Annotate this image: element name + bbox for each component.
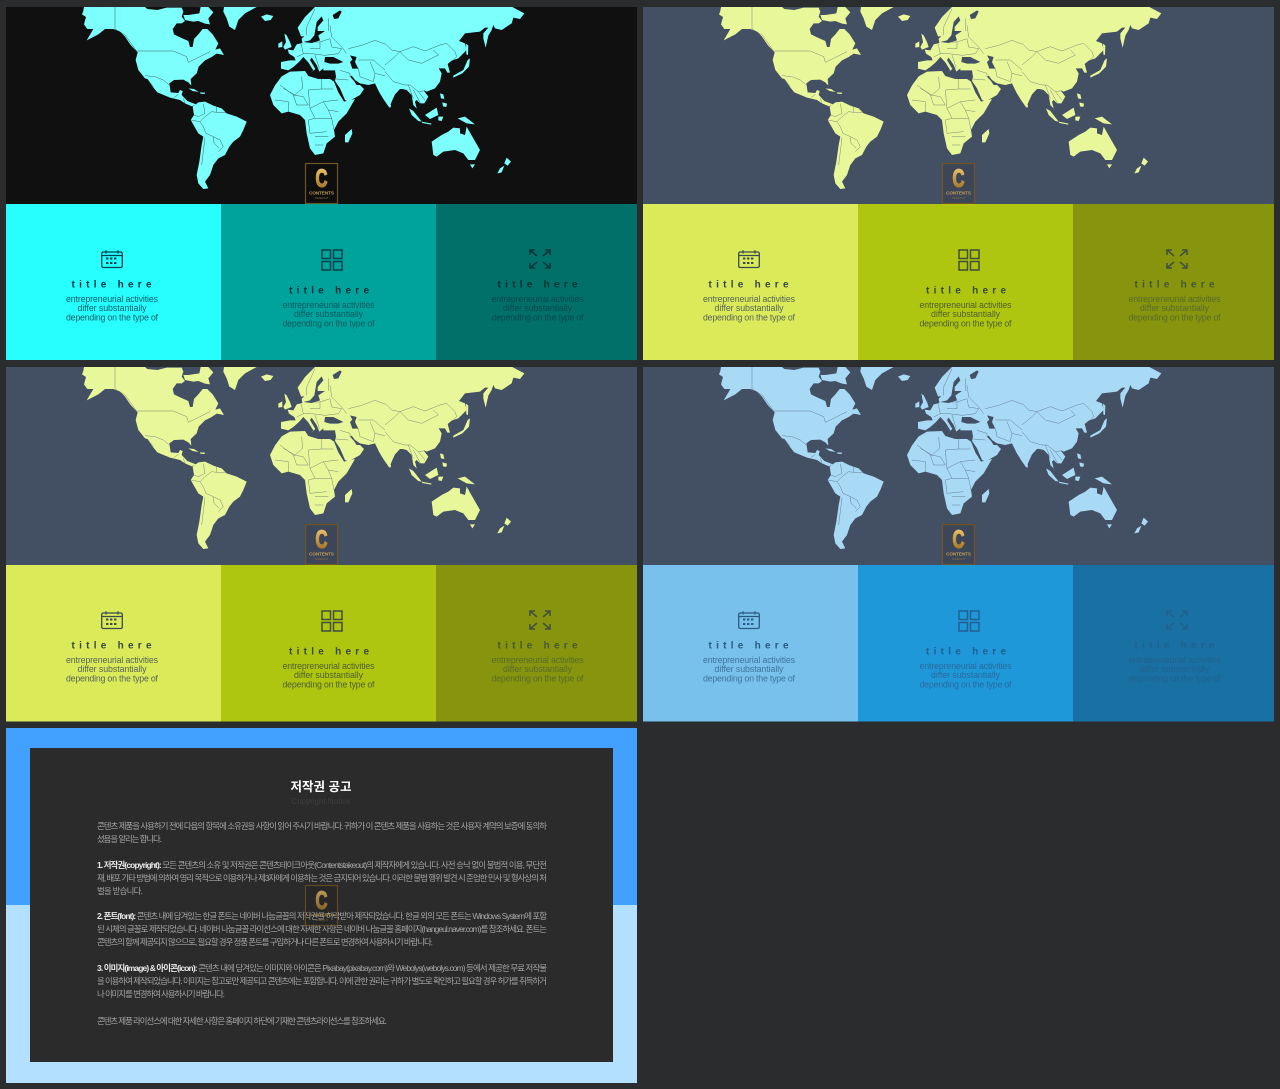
block text: entrepreneurial activities [66, 655, 159, 665]
block text: entrepreneurial activities [703, 655, 796, 665]
block text: depending on the type of [703, 312, 796, 322]
intro paragraph: 셨음을 알리는 합니다. [97, 834, 162, 844]
block text: depending on the type of [920, 318, 1012, 328]
icon: expand arrows [1167, 611, 1187, 629]
block text: entrepreneurial activities [1128, 655, 1221, 665]
icon: grid squares [959, 611, 979, 631]
notice heading: 저작권 공고 [291, 779, 351, 794]
block text [66, 294, 159, 322]
block text: depending on the type of [920, 680, 1012, 690]
block text: entrepreneurial activities [282, 300, 375, 310]
block text: depending on the type of [492, 674, 584, 684]
world map [82, 367, 524, 549]
block text [920, 300, 1012, 328]
block text: depending on the type of [66, 674, 159, 684]
closing line: 콘텐츠 제품 라이선스에 대한 자세한 사항은 홈페이지 하단에 기재한 콘텐츠라이선스를 참조하세요. [97, 1016, 387, 1026]
block text: differ substantially [503, 664, 573, 674]
map background [6, 7, 637, 204]
paragraph 1 copyright [97, 860, 547, 896]
paragraph 2 font: 콘텐츠의 함께 제공되지 않으므로, 필요할 경우 정품 폰트를 구입하거나 다른 폰트로 변경하여 사용하시기 바랍니다. [97, 937, 433, 947]
block title: title here [289, 286, 369, 296]
block: middle [221, 565, 436, 722]
block title: title here [708, 280, 789, 290]
map background [643, 7, 1274, 204]
logo badge [306, 886, 338, 926]
block text: entrepreneurial activities [703, 294, 796, 304]
logo badge [942, 524, 974, 564]
block text: differ substantially [1140, 303, 1210, 313]
block: left [643, 204, 858, 360]
block text: entrepreneurial activities [1128, 294, 1221, 304]
block: middle [858, 565, 1073, 722]
block title: title here [926, 286, 1006, 296]
world map [719, 7, 1161, 189]
icon: expand arrows [530, 250, 550, 268]
logo badge: CONTENTS [309, 552, 334, 556]
block title: title here [289, 646, 369, 658]
icon: expand arrows [1167, 250, 1187, 268]
block: left [6, 204, 221, 360]
block text: differ substantially [714, 664, 784, 674]
block text: differ substantially [931, 670, 1001, 680]
map background [6, 367, 637, 565]
block text [703, 655, 796, 684]
block: middle [858, 204, 1073, 360]
world map [82, 7, 524, 189]
block: left [643, 565, 858, 722]
block text: depending on the type of [492, 312, 584, 322]
logo badge [306, 164, 338, 204]
block text: differ substantially [714, 303, 784, 313]
panel: copyright notice [6, 728, 637, 1083]
block: left [6, 565, 221, 722]
block text [282, 661, 375, 690]
block title: title here [708, 640, 789, 652]
block: middle [221, 204, 436, 360]
icon: calendar [739, 250, 759, 268]
block text: depending on the type of [1128, 674, 1221, 684]
block title: title here [926, 646, 1006, 658]
logo badge: TAKEOUT [315, 918, 329, 922]
icon: grid squares [322, 250, 342, 270]
paragraph 2 font: 2. 폰트(font): 콘텐츠 내에 담겨있는 한글 폰트는 네이버 나눔글꼴의 저작권을 허락받아 제작되었습니다. 한글 외의 모든 폰트는 Windows System에 포함 [97, 911, 547, 921]
block text [492, 294, 584, 322]
block text: entrepreneurial activities [66, 294, 159, 304]
world map [719, 367, 1161, 549]
logo badge: C [316, 526, 328, 554]
logo badge: C [952, 526, 964, 554]
logo badge: CONTENTS [309, 912, 334, 918]
paragraph 2 font [97, 911, 547, 947]
paragraph 2 font: 된 시체의 글꼴로 제작되었습니다. 네이버 나눔글꼴 라이선스에 대한 자세한 사항은 네이버 나눔글꼴 홈페이지(hangeul.naver.com)를 참조하세요. 폰트는 [97, 924, 547, 934]
block: right [1073, 565, 1274, 722]
block title: title here [498, 640, 578, 652]
icon: calendar [739, 611, 759, 628]
block text: differ substantially [294, 670, 364, 680]
logo badge: TAKEOUT [315, 196, 329, 200]
block title: title here [72, 280, 152, 290]
paragraph 3 images and icons: 나 이미지를 변경하여 사용하시기 바랍니다. [97, 989, 225, 999]
block text [66, 655, 159, 684]
icon: grid squares [322, 611, 342, 631]
logo badge: TAKEOUT [952, 196, 966, 200]
paragraph 1 copyright: 1. 저작권(copyright): 모든 콘텐츠의 소유 및 저작권은 콘텐츠테이크아웃(Contentstakeout)의 제작자에게 있습니다. 사전 승낙 없이 불법적 이용, 무단전 [97, 860, 547, 870]
block text: differ substantially [78, 303, 147, 313]
icon: calendar [102, 611, 122, 628]
panel: slide 2 lime [643, 7, 1274, 360]
logo badge: CONTENTS [946, 552, 971, 556]
block text: differ substantially [294, 309, 364, 319]
paragraph 1 copyright: 벌을 받습니다. [97, 886, 143, 896]
icon: expand arrows [530, 611, 550, 629]
block title: title here [1134, 640, 1215, 652]
paragraph 3 images and icons: 3. 이미지(image) & 아이콘(icon): 콘텐츠 내에 담겨있는 이미지와 아이콘은 Pixabay(pixabay.com)와 Webolys(webolys.com) 등에서 제공한 무료 저작물 [97, 963, 547, 973]
block text: differ substantially [503, 303, 573, 313]
block text: depending on the type of [1128, 312, 1221, 322]
panel: slide 4 blue [643, 367, 1274, 722]
block text: entrepreneurial activities [920, 661, 1012, 671]
logo badge: CONTENTS [309, 190, 334, 196]
logo badge: CONTENTS [946, 190, 971, 196]
icon: calendar [102, 250, 122, 268]
logo badge [942, 164, 974, 204]
block text: entrepreneurial activities [920, 300, 1012, 310]
block text [492, 655, 584, 684]
paragraph 3 images and icons [97, 963, 547, 999]
block text [703, 294, 796, 322]
block text [920, 661, 1012, 690]
logo badge: C [316, 165, 328, 193]
paragraph 1 copyright: 재, 배포 기타 방법에 의하여 영리 목적으로 이용하거나 제3자에게 이용하는 것은 금지되어 있습니다. 이러한 불법 행위 발견 시 준엄한 민사 및 형사상의 처 [97, 873, 547, 883]
dark notice card [30, 748, 613, 1062]
block text: differ substantially [78, 664, 147, 674]
logo badge [306, 524, 338, 564]
block text [282, 300, 375, 328]
block text: depending on the type of [703, 674, 796, 684]
block text: entrepreneurial activities [492, 294, 584, 304]
map background [643, 367, 1274, 565]
intro paragraph [97, 821, 547, 844]
block: right [1073, 204, 1274, 360]
logo badge: TAKEOUT [952, 557, 966, 561]
block text [1128, 294, 1221, 322]
block text: depending on the type of [66, 312, 159, 322]
block text: differ substantially [1140, 664, 1210, 674]
block text: entrepreneurial activities [492, 655, 584, 665]
logo badge: C [316, 887, 328, 915]
logo badge: C [952, 165, 964, 193]
paragraph 3 images and icons: 을 이용하여 제작되었습니다. 이미지는 참고로만 제공되고 콘텐츠에는 포함합니다. 이에 관한 권리는 귀하가 별도로 확인하고 필요할 경우 허가를 취득하거 [97, 976, 547, 986]
panel: slide 1 cyan [6, 7, 637, 360]
intro paragraph: 콘텐츠 제품을 사용하기 전에 다음의 항목에 소유권을 사항이 읽어 주시기 바랍니다. 귀하가 이 콘텐츠 제품을 사용하는 것은 사용자 계약의 보증에 동의하 [97, 821, 547, 831]
block text: entrepreneurial activities [282, 661, 375, 671]
block text: depending on the type of [282, 680, 375, 690]
block: right [436, 204, 637, 360]
panel: slide 3 lime [6, 367, 637, 722]
block title: title here [1134, 280, 1215, 290]
notice subheading: Copyright Notice [291, 797, 351, 806]
block text [1128, 655, 1221, 684]
block text: differ substantially [931, 309, 1001, 319]
two-tone backdrop [6, 728, 637, 1083]
block title: title here [498, 280, 578, 290]
block text: depending on the type of [282, 318, 375, 328]
icon: grid squares [959, 250, 979, 270]
logo badge: TAKEOUT [315, 557, 329, 561]
block: right [436, 565, 637, 722]
block title: title here [72, 640, 152, 652]
